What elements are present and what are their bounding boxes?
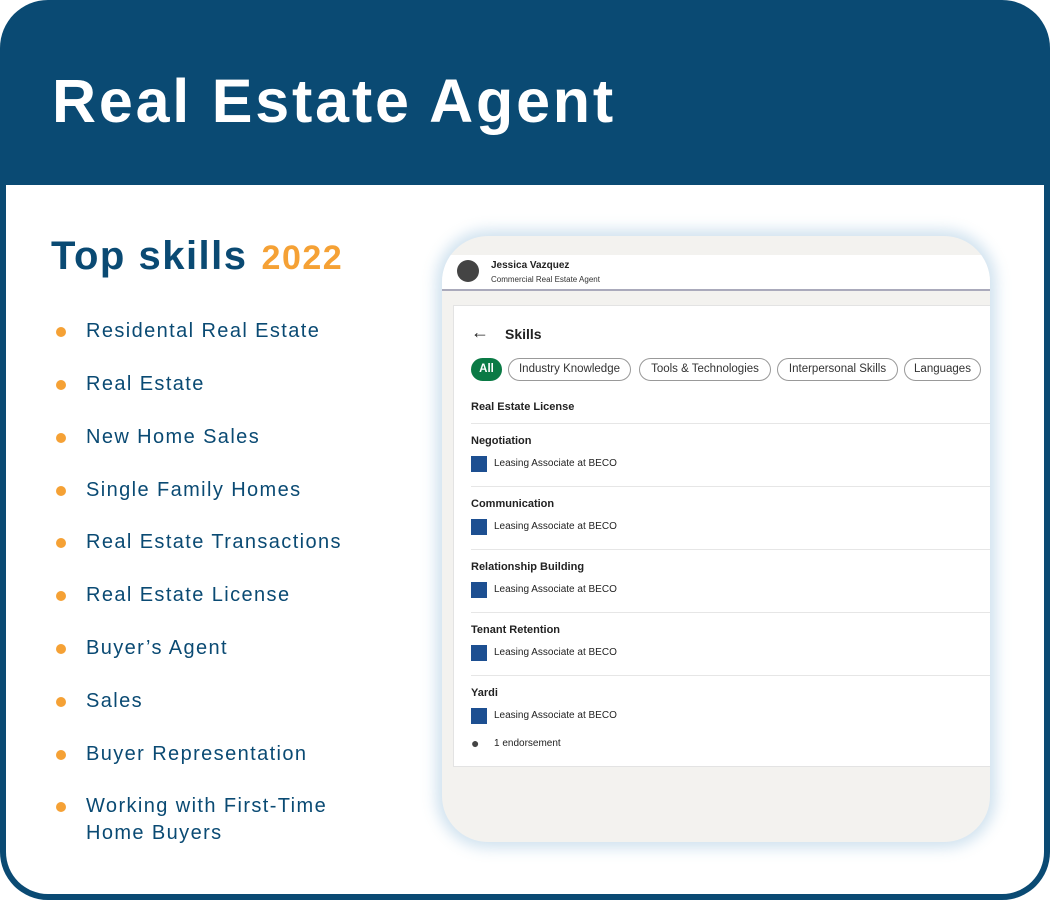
heading: top skills: Top skills 2022 (51, 234, 343, 278)
text: Single Family Homes (86, 479, 302, 501)
text: Real Estate License (86, 584, 290, 606)
text: Real Estate Transactions (86, 531, 342, 553)
skills card: Tools & Technologies (651, 363, 759, 375)
text: Buyer Representation (86, 743, 307, 765)
skills card: Leasing Associate at BECO (494, 647, 617, 658)
skills card: Communication (471, 498, 554, 510)
text: Buyer’s Agent (86, 637, 228, 659)
title: Real Estate Agent (52, 67, 616, 135)
skills card: Leasing Associate at BECO (494, 710, 617, 721)
text: New Home Sales (86, 426, 260, 448)
skills card: Negotiation (471, 435, 532, 447)
skills card: Skills (505, 326, 542, 342)
phone mockup (442, 236, 990, 842)
skills card: Interpersonal Skills (789, 363, 886, 375)
profile bar: Jessica Vazquez (491, 260, 569, 271)
text: Home Buyers (86, 822, 223, 844)
skills card: ● (471, 735, 479, 751)
skills card: Leasing Associate at BECO (494, 458, 617, 469)
skills card: All (479, 363, 494, 375)
skills card: Tenant Retention (471, 624, 560, 636)
text: Working with First-Time (86, 795, 327, 817)
skills card: Yardi (471, 687, 498, 699)
skills card: Leasing Associate at BECO (494, 521, 617, 532)
text: Residental Real Estate (86, 320, 320, 342)
skills card (453, 305, 990, 767)
skills card: Relationship Building (471, 561, 584, 573)
text: Sales (86, 690, 143, 712)
skills card: ← (471, 322, 489, 342)
skills card: Leasing Associate at BECO (494, 584, 617, 595)
inner panel (6, 185, 1044, 894)
skills card: 1 endorsement (494, 738, 561, 749)
skills card: Languages (914, 363, 971, 375)
text: Real Estate (86, 373, 205, 395)
profile bar (442, 255, 990, 291)
skills list (56, 320, 342, 844)
profile bar: Commercial Real Estate Agent (491, 275, 600, 284)
skills card: Industry Knowledge (519, 363, 620, 375)
skills card: Real Estate License (471, 401, 574, 413)
